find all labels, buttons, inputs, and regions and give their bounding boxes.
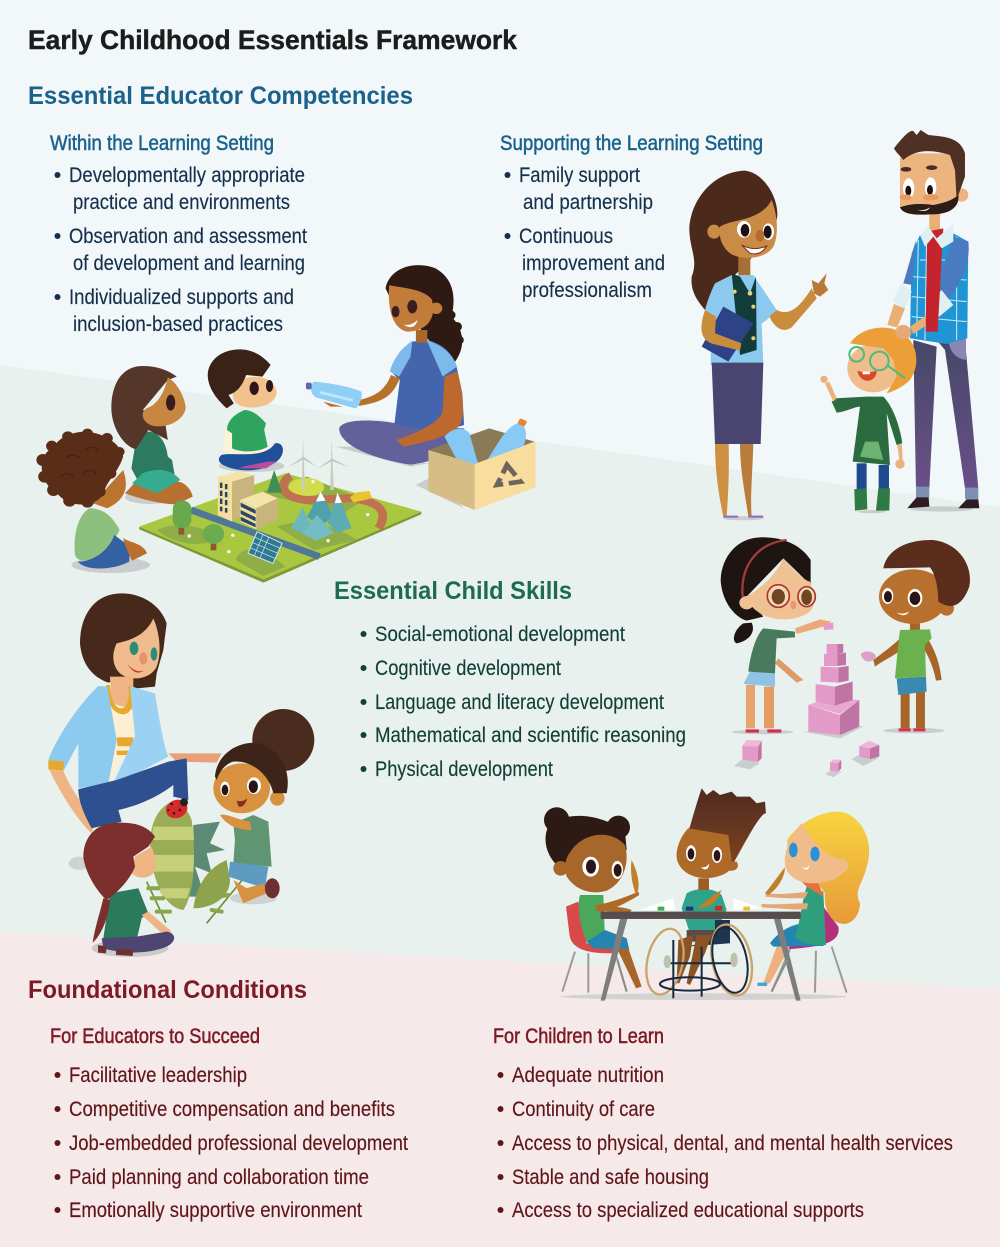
illustration: children building block tower (721, 537, 970, 777)
illustration: teacher and children examining plants (48, 593, 314, 957)
man with plaid shirt (887, 130, 979, 508)
crouching teacher (48, 593, 222, 833)
panel: supporting the learning setting: Continuous (519, 225, 613, 248)
illustration: teacher and children with recycling model (36, 265, 536, 583)
scattered blocks (734, 740, 879, 777)
section heading: Essential Child Skills: Essential Child Skills (334, 577, 572, 605)
subheading: supporting the learning setting: Supporting the Learning Setting (500, 132, 763, 155)
block tower (808, 644, 859, 735)
background: foundational conditions zone (0, 932, 1000, 1247)
boy with pink block (861, 540, 970, 731)
panel: for educators to succeed: Facilitative leadership (69, 1064, 247, 1087)
subheading: for children to learn: For Children to Learn (493, 1025, 664, 1048)
list: child skills: Social-emotional development (375, 623, 625, 646)
section heading: Foundational Conditions: Foundational Conditions (28, 976, 307, 1004)
list: child skills: Physical development (375, 758, 553, 781)
car (350, 491, 372, 503)
buildings (218, 472, 254, 482)
panel: for educators to succeed: Job-embedded professional development (69, 1132, 408, 1155)
panel: for educators to succeed: Competitive compensation and benefits (69, 1098, 395, 1121)
recycling box (428, 418, 536, 510)
child with curly hair (36, 429, 147, 569)
child in green shirt (208, 349, 283, 470)
illustration: two educators with child (689, 130, 979, 520)
panel: for educators to succeed: Emotionally supportive environment (69, 1199, 362, 1222)
subheading: for educators to succeed: For Educators to Succeed (50, 1025, 260, 1048)
illustration: children painting at table, one in wheelchair (544, 788, 869, 1001)
background: child skills zone (0, 365, 1000, 1000)
woman with folder (689, 171, 828, 518)
panel: for children to learn (493, 1025, 953, 1222)
panel: supporting the learning setting: and partnership (523, 191, 653, 214)
model landscape board (139, 438, 421, 583)
plants and ladybug (147, 797, 245, 923)
seated teacher holding bottle (306, 265, 464, 465)
list: child skills: Cognitive development (375, 657, 561, 680)
list: child skills (360, 623, 686, 781)
red chair with left child (544, 807, 642, 993)
girl with braid (83, 823, 174, 956)
title: Early Childhood Essentials Framework (28, 25, 518, 55)
panel: within the learning setting (50, 132, 307, 336)
panel: for children to learn: Stable and safe housing (512, 1166, 709, 1189)
trees (179, 527, 184, 535)
wheelchair child (641, 788, 766, 999)
painting table (601, 898, 801, 1001)
panel: supporting the learning setting: improvement and (522, 252, 665, 275)
list: child skills: Language and literacy development (375, 691, 664, 714)
subheading: within the learning setting: Within the Learning Setting (50, 132, 274, 155)
panel: within the learning setting: Observation and assessment (69, 225, 307, 248)
panel: within the learning setting: inclusion-based practices (73, 313, 283, 336)
mountains (291, 507, 312, 533)
panel: supporting the learning setting: Family support (519, 164, 640, 187)
panel: within the learning setting: of development and learning (73, 252, 305, 275)
panel: for children to learn: Access to specialized educational supports (512, 1199, 864, 1222)
section heading: Essential Educator Competencies: Essential Educator Competencies (28, 82, 413, 110)
blond child with magenta chair (757, 812, 869, 993)
bottle in hand (311, 382, 362, 408)
flowers (187, 480, 369, 553)
boy with glasses (820, 325, 916, 511)
girl with hair bun (213, 709, 314, 903)
panel: within the learning setting: Individualized supports and (69, 286, 294, 309)
panel: for children to learn: Continuity of care (512, 1098, 655, 1121)
panel: for educators to succeed (50, 1025, 408, 1222)
wind turbines (302, 438, 334, 490)
panel: supporting the learning setting (500, 132, 763, 302)
panel: within the learning setting: practice and environments (73, 191, 290, 214)
child with long hair (111, 366, 193, 504)
panel: for children to learn: Adequate nutrition (512, 1064, 664, 1087)
panel: for educators to succeed: Paid planning and collaboration time (69, 1166, 369, 1189)
solar panel (248, 532, 282, 563)
list: child skills: Mathematical and scientific reasoning (375, 724, 686, 747)
panel: within the learning setting: Developmentally appropriate (69, 164, 305, 187)
panel: supporting the learning setting: professionalism (522, 279, 652, 302)
girl with red glasses (721, 537, 833, 733)
